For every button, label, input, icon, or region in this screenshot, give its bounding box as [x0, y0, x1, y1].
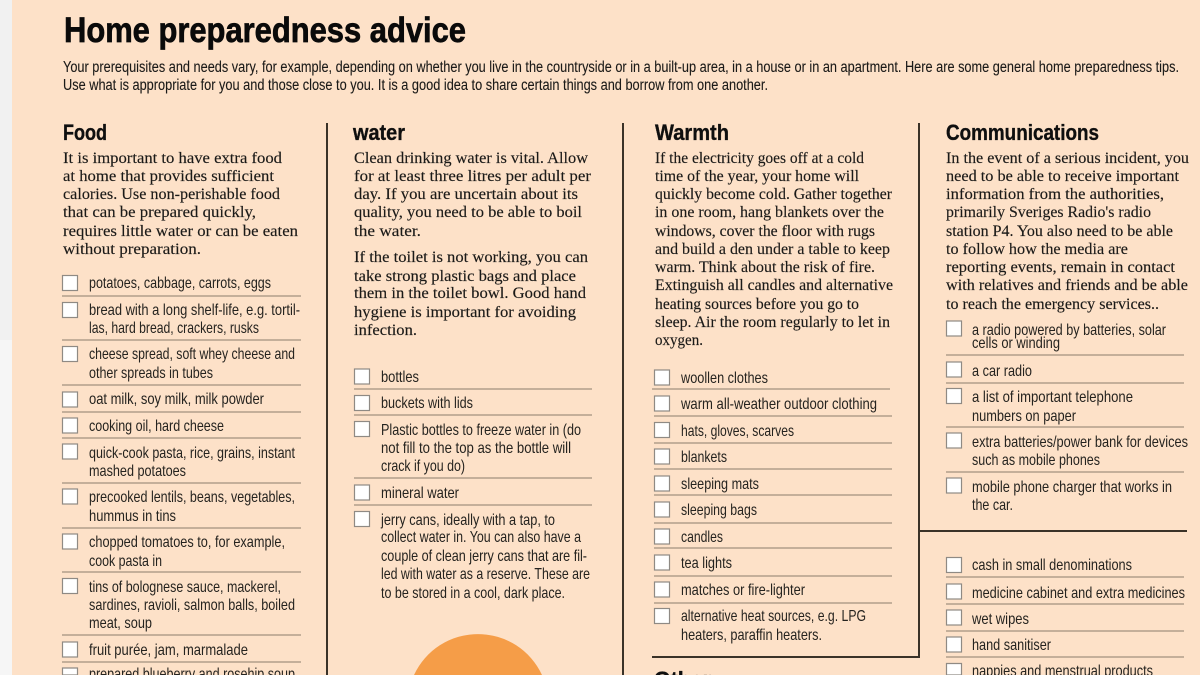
- water checklist: collect water in. You can also have a: [381, 529, 581, 546]
- food checklist: chopped tomatoes to, for example,: [89, 534, 285, 551]
- food intro text: at home that provides sufficient: [63, 168, 275, 185]
- warmth checklist: blankets: [681, 449, 727, 466]
- food checklist: tins of bolognese sauce, mackerel,: [89, 579, 281, 596]
- food intro text: without preparation.: [63, 241, 201, 258]
- food checklist: other spreads in tubes: [89, 365, 213, 382]
- warmth checklist: woollen clothes: [680, 370, 768, 387]
- panel: food: [62, 120, 301, 675]
- warmth intro text: oxygen.: [655, 332, 703, 349]
- water checklist: [354, 369, 592, 602]
- communications checklist: cells or winding: [972, 335, 1060, 352]
- food checklist: las, hard bread, crackers, rusks: [89, 320, 259, 337]
- water checklist: crack if you do): [381, 458, 465, 475]
- water checklist: couple of clean jerry cans that are fil-: [381, 548, 587, 565]
- food checklist: mashed potatoes: [89, 463, 186, 480]
- communications checklist: numbers on paper: [972, 408, 1077, 425]
- food checklist: bread with a long shelf-life, e.g. tortil-: [89, 302, 300, 319]
- panel: other checklist: [946, 557, 1185, 675]
- warmth checklist: sleeping mats: [681, 476, 759, 493]
- panel: other checklist: cash in small denominations: [972, 557, 1132, 574]
- heading: communications: Communications: [946, 120, 1099, 145]
- water checklist: mineral water: [381, 485, 460, 502]
- food checklist: cook pasta in: [89, 553, 162, 570]
- warmth intro text: quickly become cold. Gather together: [655, 186, 893, 203]
- food checklist: sardines, ravioli, salmon balls, boiled: [89, 597, 295, 614]
- communications intro text: In the event of a serious incident, you: [946, 150, 1189, 167]
- food checklist: [62, 275, 301, 675]
- communications intro text: with relatives and friends and be able: [946, 277, 1188, 294]
- food intro text: It is important to have extra food: [63, 150, 282, 167]
- warmth intro text: heating sources before you go to: [655, 296, 859, 313]
- warmth checklist: sleeping bags: [681, 502, 757, 519]
- water checklist: buckets with lids: [381, 395, 473, 412]
- food intro text: calories. Use non-perishable food: [63, 186, 280, 203]
- food intro text: requires little water or can be eaten: [63, 223, 298, 240]
- food checklist: fruit purée, jam, marmalade: [89, 642, 248, 659]
- warmth intro text: and build a den under a table to keep: [655, 241, 890, 258]
- water checklist: bottles: [381, 369, 419, 386]
- warmth checklist: hats, gloves, scarves: [681, 423, 794, 440]
- communications intro text: [946, 150, 1189, 313]
- food checklist: meat, soup: [89, 615, 152, 632]
- warmth checklist: tea lights: [681, 555, 732, 572]
- communications intro text: information from the authorities,: [946, 186, 1164, 203]
- water intro text: [354, 150, 592, 339]
- water intro text: hygiene is important for avoiding: [354, 304, 576, 321]
- communications checklist: a car radio: [972, 363, 1032, 380]
- food checklist: precooked lentils, beans, vegetables,: [89, 489, 295, 506]
- water intro text: Clean drinking water is vital. Allow: [354, 150, 588, 167]
- food checklist: cheese spread, soft whey cheese and: [89, 346, 295, 363]
- panel: other checklist: hand sanitiser: [972, 637, 1052, 654]
- warmth intro text: [655, 150, 893, 349]
- water intro text: the water.: [354, 223, 421, 240]
- communications intro text: to reach the emergency services..: [946, 296, 1159, 313]
- communications intro text: primarily Sveriges Radio's radio: [946, 204, 1151, 221]
- warmth checklist: warm all-weather outdoor clothing: [680, 396, 877, 413]
- communications intro text: station P4. You also need to be able: [946, 223, 1173, 240]
- communications intro text: need to be able to receive important: [946, 168, 1180, 185]
- warmth checklist: alternative heat sources, e.g. LPG: [681, 608, 866, 625]
- heading: food: Food: [63, 120, 107, 145]
- water intro text: take strong plastic bags and place: [354, 268, 576, 285]
- communications checklist: [946, 321, 1188, 514]
- communications intro text: to follow how the media are: [946, 241, 1128, 258]
- warmth intro text: If the electricity goes off at a cold: [655, 150, 864, 167]
- intro text: [63, 59, 1179, 94]
- panel: water: [352, 120, 592, 675]
- food intro text: that can be prepared quickly,: [63, 204, 256, 221]
- water intro text: quality, you need to be able to boil: [354, 204, 583, 221]
- panel: communications: [946, 120, 1189, 514]
- warmth checklist: matches or fire-lighter: [681, 582, 806, 599]
- water intro text: If the toilet is not working, you can: [354, 249, 588, 266]
- water checklist: jerry cans, ideally with a tap, to: [380, 512, 555, 529]
- warmth checklist: [652, 370, 892, 644]
- panel: other checklist: wet wipes: [971, 611, 1029, 628]
- food checklist: quick-cook pasta, rice, grains, instant: [89, 445, 295, 462]
- water intro text: day. If you are uncertain about its: [354, 186, 578, 203]
- food checklist: oat milk, soy milk, milk powder: [89, 391, 265, 408]
- communications intro text: reporting events, remain in contact: [946, 259, 1176, 276]
- food checklist: hummus in tins: [89, 508, 176, 525]
- food checklist: potatoes, cabbage, carrots, eggs: [89, 275, 271, 292]
- warmth intro text: windows, cover the floor with rugs: [655, 223, 875, 240]
- heading: warmth: Warmth: [655, 120, 729, 145]
- warmth intro text: time of the year, your home will: [655, 168, 860, 185]
- title: Home preparedness advice: [64, 11, 466, 50]
- communications checklist: a list of important telephone: [972, 389, 1133, 406]
- warmth intro text: Extinguish all candles and alternative: [655, 277, 893, 294]
- water intro text: infection.: [354, 322, 417, 339]
- water checklist: not fill to the top as the bottle will: [381, 440, 571, 457]
- intro text: Use what is appropriate for you and those close to you. It is a good idea to share certain things and borrow from one another.: [63, 77, 768, 94]
- warmth checklist: candles: [681, 529, 723, 546]
- water intro text: them in the toilet bowl. Good hand: [354, 285, 586, 302]
- food intro text: [63, 150, 298, 258]
- warmth intro text: in one room, hang blankets over the: [655, 204, 884, 221]
- water intro text: for at least three litres per adult per: [354, 168, 592, 185]
- warmth intro text: warm. Think about the risk of fire.: [655, 259, 875, 276]
- icon: orange circle: [414, 634, 542, 675]
- food checklist: cooking oil, hard cheese: [89, 418, 224, 435]
- water checklist: to be stored in a cool, dark place.: [381, 585, 565, 602]
- water checklist: led with water as a reserve. These are: [381, 566, 590, 583]
- heading: water: water: [352, 120, 405, 145]
- warmth checklist: heaters, paraffin heaters.: [681, 627, 822, 644]
- warmth intro text: sleep. Air the room regularly to let in: [655, 314, 890, 331]
- communications checklist: the car.: [972, 497, 1013, 514]
- panel: warmth: [652, 120, 893, 644]
- communications checklist: such as mobile phones: [972, 452, 1100, 469]
- water checklist: Plastic bottles to freeze water in (do: [381, 422, 581, 439]
